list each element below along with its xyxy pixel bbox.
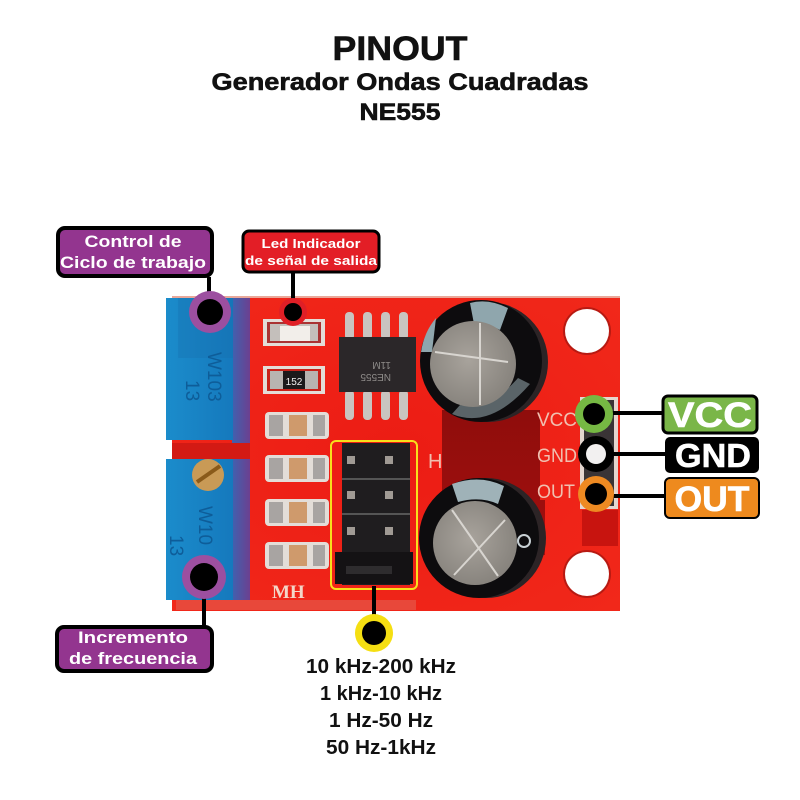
marker: jumper [355,614,393,652]
label: VCC: VCC [668,396,752,435]
connector lines [204,272,667,628]
top blue trimmer: 13 [181,380,202,401]
bottom blue trimmer [165,443,250,600]
red PCB [172,297,620,611]
frequency ranges list: 10 kHz-200 kHz [306,656,456,678]
label: Led Indicador [243,231,379,272]
MH silkscreen: MH [272,582,305,603]
marker: incremento [182,555,226,599]
label: Control de Ciclo de trabajo: Ciclo de trabajo [60,253,206,272]
silkscreen pin labels: OUT [537,482,575,503]
trimmer screw [192,459,224,491]
LED component [263,319,325,346]
model name: NE555 [360,99,440,126]
marker: control de ciclo [189,291,231,333]
silkscreen pin labels: VCC [537,410,577,431]
label: Incremento de frecuencia: de frecuencia [69,649,198,668]
title [212,30,588,126]
marker: OUT [578,476,614,512]
frequency ranges list: 1 Hz-50 Hz [329,710,433,732]
marker: VCC [575,395,613,433]
label: Incremento de frecuencia: Incremento [78,628,188,647]
bottom blue trimmer: 13 [165,535,186,556]
mounting holes [563,307,611,355]
frequency ranges list: 1 kHz-10 kHz [320,683,442,705]
label: Control de Ciclo de trabajo [58,228,212,276]
top blue trimmer [166,298,250,445]
bottom capacitor [419,478,546,598]
silkscreen pin labels [428,410,577,503]
module board photo [165,296,620,611]
marker: led [279,298,307,326]
label: Incremento de frecuencia [57,627,212,671]
label: Led Indicador: Led Indicador [262,236,360,251]
silkscreen pin labels: GND [537,446,577,467]
label: Led Indicador: de señal de salida [245,253,378,268]
subtitle: Generador Ondas Cuadradas [212,69,588,96]
resistor 152 [263,366,325,394]
label: Control de Ciclo de trabajo: Control de [84,232,182,251]
frequency ranges list: 50 Hz-1kHz [326,737,436,759]
jumper header [335,443,413,585]
yellow jumper outline [331,441,417,589]
NE555 chip: NE555 [360,371,391,382]
top blue trimmer: W103 [203,352,224,402]
bottom blue trimmer: W10 [194,506,215,545]
silkscreen pin labels: H [428,451,442,473]
label: GND: GND [675,437,751,474]
NE555 chip [339,312,416,420]
capacitors SMD [265,412,329,569]
top capacitor [420,300,548,422]
marker: GND [578,436,614,472]
title: PINOUT [332,30,468,68]
resistor 152: 152 [286,377,303,388]
label: OUT: OUT [674,480,750,519]
pin header strip [580,397,618,509]
shadow between capacitors [442,410,545,555]
frequency ranges list [306,656,456,759]
NE555 chip: 11M [372,359,391,370]
